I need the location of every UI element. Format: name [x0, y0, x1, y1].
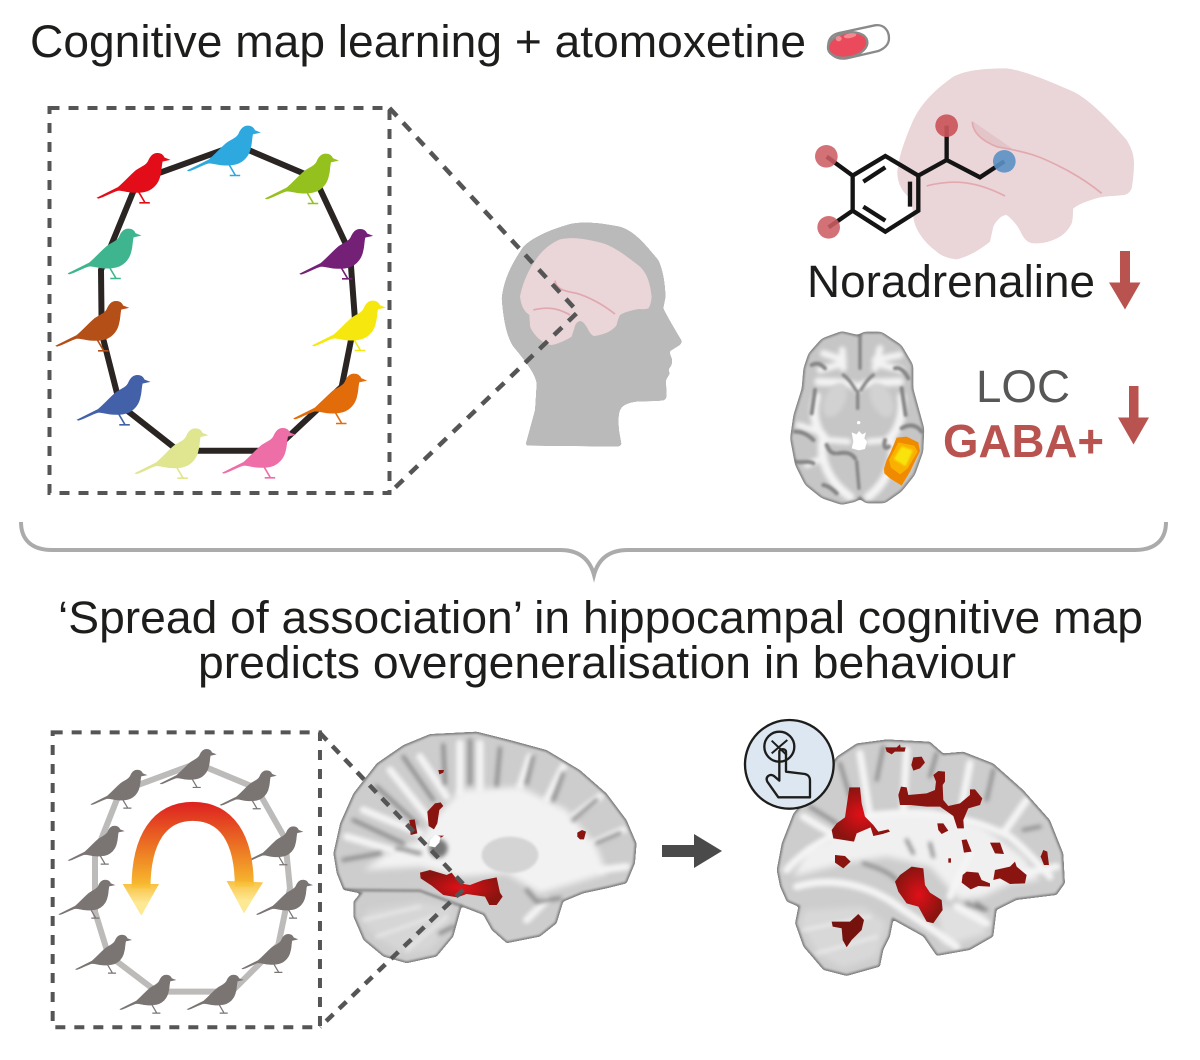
- molecule skeleton: [827, 126, 1004, 232]
- pink brain: [897, 68, 1134, 259]
- arrow: noradrenaline down: [1109, 251, 1140, 310]
- arrow: hippocampus to behaviour: [662, 834, 722, 868]
- heading: spread of association: predicts overgeneralisation in behaviour: [198, 637, 1016, 688]
- ring graph: [95, 763, 290, 992]
- title: Cognitive map learning + atomoxetine: [30, 16, 806, 67]
- grey birds: [59, 749, 312, 1013]
- arrow: spread of association: [123, 811, 263, 916]
- LOC activation: [884, 437, 920, 486]
- dashed zoom box: [53, 732, 320, 1027]
- ring graph: [101, 145, 355, 451]
- LOC label: LOC: [976, 361, 1070, 412]
- arrow: GABA down: [1118, 386, 1149, 444]
- icon: hand pressing button: [745, 720, 834, 809]
- activation clusters: [832, 744, 1049, 947]
- dashed zoom box: [50, 108, 390, 493]
- panel: grey bird ring: [53, 732, 320, 1027]
- ventricle: [852, 431, 867, 450]
- sagittal brain: behaviour: [777, 740, 1065, 976]
- zoom lines: bottom box to hippocampus: [320, 733, 466, 1027]
- icon: pill: [826, 25, 889, 61]
- icon: head with brain: [502, 223, 682, 447]
- molecule and brain: noradrenaline: [815, 68, 1134, 259]
- activation clusters: [409, 770, 586, 905]
- axial brain with LOC: [790, 332, 924, 504]
- GABA+ label: GABA+: [943, 415, 1104, 467]
- noradrenaline label: Noradrenaline: [807, 256, 1095, 307]
- sagittal brain: hippocampus: [334, 732, 636, 963]
- brace: [21, 522, 1166, 575]
- zoom lines: top box to head: [390, 108, 578, 493]
- birds: [56, 126, 385, 478]
- heading: spread of association: ‘Spread of association’ in hippocampal cognitive map: [58, 592, 1143, 643]
- heading: spread of association: [58, 592, 1143, 688]
- panel: coloured bird ring: [50, 108, 390, 493]
